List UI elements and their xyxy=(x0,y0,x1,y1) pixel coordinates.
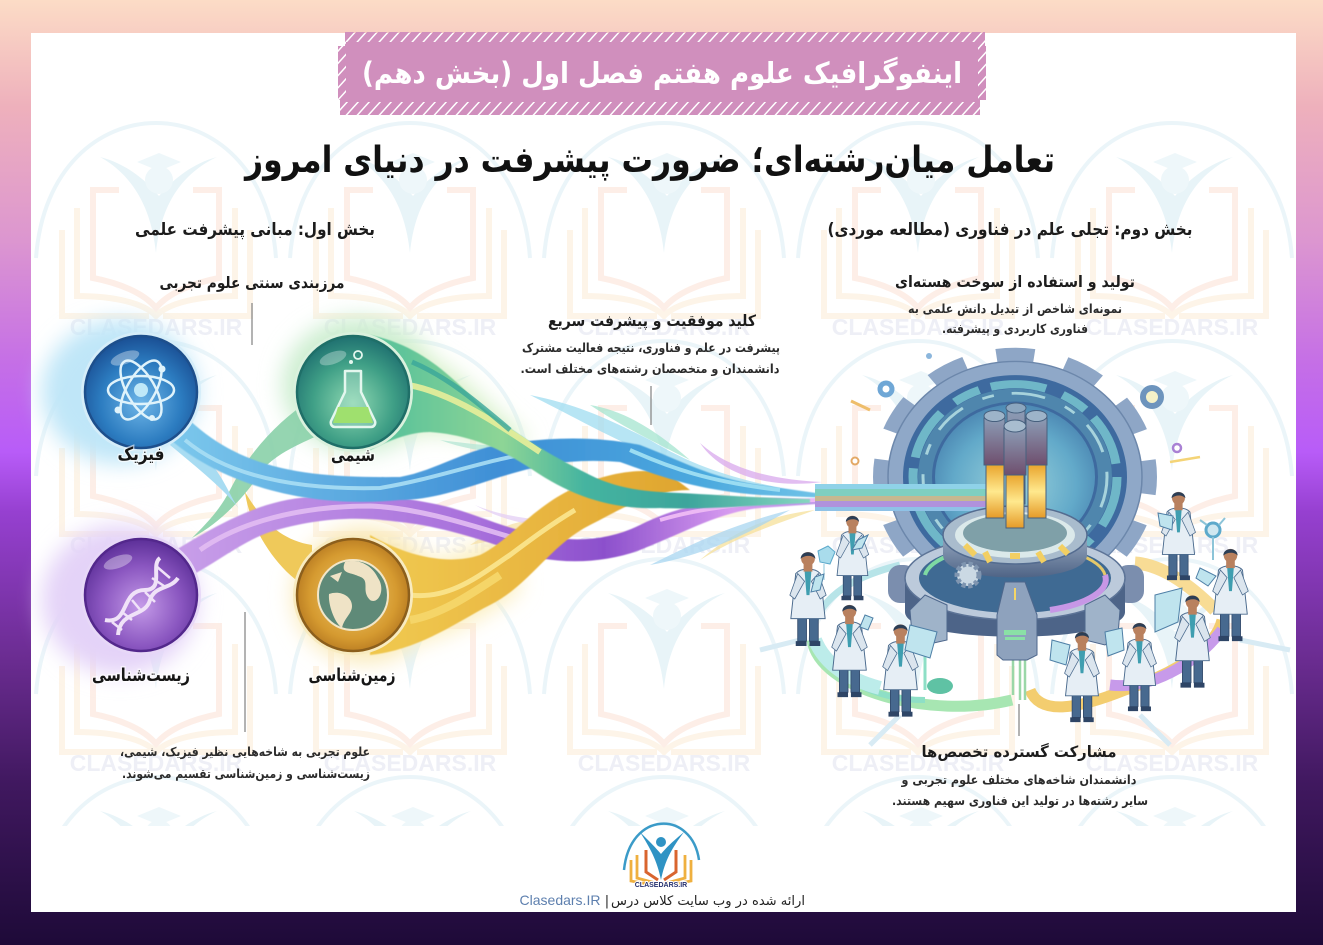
section heading: part two: بخش دوم: تجلی علم در فناوری (مطالعه موردی) xyxy=(828,220,1192,240)
watermark pattern: CLASEDARS.IR xyxy=(70,532,243,558)
watermark pattern: CLASEDARS.IR xyxy=(324,532,497,558)
text block: key to success: پیشرفت در علم و فناوری، نتیجه فعالیت مشترک xyxy=(522,340,780,355)
scientist 8 xyxy=(1213,549,1248,641)
illustration: small gears and particles xyxy=(851,353,1200,464)
icon: DNA helix xyxy=(105,558,178,635)
illustration: energy beam xyxy=(815,484,995,511)
wisps xyxy=(440,395,822,565)
text block: broad expertise: دانشمندان شاخه‌های مختلف علوم تجربی و xyxy=(901,772,1136,788)
text block: key to success: کلید موفقیت و پیشرفت سریع xyxy=(548,312,757,331)
orb: biology xyxy=(81,535,201,655)
text block: nuclear fuel: نمونه‌ای شاخص از تبدیل دانش علمی به xyxy=(908,301,1122,316)
tablets xyxy=(811,513,1216,665)
watermark pattern: CLASEDARS.IR xyxy=(324,750,497,776)
watermark pattern: CLASEDARS.IR xyxy=(1086,532,1259,558)
footer credit: ارائه شده در وب سایت کلاس درس xyxy=(611,894,805,909)
rod back centre xyxy=(1006,403,1026,504)
text block: nuclear fuel xyxy=(895,273,1135,336)
discipline labels: زمین‌شناسی xyxy=(308,665,396,686)
logo xyxy=(624,824,699,889)
footer credit: Clasedars.IR xyxy=(520,892,600,908)
stream: purple xyxy=(160,495,830,590)
orb: chemistry xyxy=(293,332,413,452)
scientist 1 xyxy=(790,552,826,646)
illustration: gear xyxy=(884,358,1146,596)
console pods xyxy=(910,595,947,645)
rod right xyxy=(1026,410,1047,518)
stream: blue xyxy=(160,400,830,502)
scientist 7 xyxy=(1175,595,1210,688)
text block: nuclear fuel: فناوری کاربردی و پیشرفته. xyxy=(942,321,1088,336)
scientist 4 xyxy=(883,624,918,717)
illustration: fuel rods xyxy=(984,403,1047,528)
text block: sciences branches xyxy=(120,744,370,781)
icons: scientists' floating holograms xyxy=(818,518,1225,580)
stream: yellow xyxy=(370,471,690,655)
watermark pattern: CLASEDARS.IR xyxy=(832,750,1005,776)
title: تعامل میان‌رشته‌ای؛ ضرورت پیشرفت در دنیای امروز xyxy=(243,140,1055,181)
orb: physics xyxy=(81,332,201,452)
icon: flask xyxy=(331,351,375,427)
watermark pattern: CLASEDARS.IR xyxy=(1086,314,1259,340)
stream: chemistry left arm xyxy=(192,400,325,538)
watermark pattern: CLASEDARS.IR xyxy=(832,532,1005,558)
discipline labels: شیمی xyxy=(331,445,375,466)
icon: globe xyxy=(318,560,388,630)
watermark pattern: CLASEDARS.IR xyxy=(70,314,243,340)
footer credit xyxy=(520,892,805,909)
section heading: part one: بخش اول: مبانی پیشرفت علمی xyxy=(135,220,375,240)
stream: geology left arm xyxy=(245,492,312,590)
orb: geology xyxy=(293,535,413,655)
watermark pattern: CLASEDARS.IR xyxy=(832,314,1005,340)
scientist 3 xyxy=(832,605,867,697)
logo: CLASEDARS.IR xyxy=(635,882,687,889)
rod front xyxy=(1004,420,1026,528)
subheading: traditional boundaries: مرزبندی سنتی علوم تجربی xyxy=(160,274,344,292)
watermark pattern xyxy=(31,118,1296,826)
banner xyxy=(338,32,986,115)
banner: اینفوگرافیک علوم هفتم فصل اول (بخش دهم) xyxy=(362,56,962,90)
text block: broad expertise xyxy=(892,742,1148,808)
text block: key to success: دانشمندان و متخصصان رشته‌های مختلف است. xyxy=(520,361,780,376)
text block: nuclear fuel: تولید و استفاده از سوخت هسته‌ای xyxy=(895,273,1135,291)
scientists group xyxy=(790,492,1248,722)
text block: sciences branches: علوم تجربی به شاخه‌هایی نظیر فیزیک، شیمی، xyxy=(120,744,370,760)
text block: broad expertise: مشارکت گسترده تخصص‌ها xyxy=(922,742,1116,761)
discipline labels: فیزیک xyxy=(118,444,164,465)
watermark pattern: CLASEDARS.IR xyxy=(578,314,751,340)
text block: broad expertise: سایر رشته‌ها در تولید این فناوری سهیم هستند. xyxy=(892,793,1148,808)
scientist 9 xyxy=(1161,492,1195,580)
text block: key to success xyxy=(520,312,780,376)
icon: atom xyxy=(108,354,174,426)
flowing discipline streams xyxy=(42,317,830,675)
discipline labels xyxy=(92,444,396,686)
soft glows behind orbs xyxy=(42,317,530,675)
discipline labels: زیست‌شناسی xyxy=(92,665,190,686)
watermark pattern: CLASEDARS.IR xyxy=(578,532,751,558)
text block: sciences branches: زیست‌شناسی و زمین‌شناسی تقسیم می‌شوند. xyxy=(122,766,370,781)
connector lines xyxy=(245,303,1019,736)
illustration: reactor base xyxy=(888,506,1144,660)
stream: green xyxy=(370,335,810,508)
scientist 6 xyxy=(1122,623,1156,711)
illustration: floor circuit paths xyxy=(760,563,1290,745)
scientist 5 xyxy=(1065,632,1099,722)
watermark pattern: CLASEDARS.IR xyxy=(324,314,497,340)
watermark pattern: CLASEDARS.IR xyxy=(70,750,243,776)
watermark pattern: CLASEDARS.IR xyxy=(1086,750,1259,776)
rod left xyxy=(984,410,1005,518)
watermark pattern: CLASEDARS.IR xyxy=(578,750,751,776)
scientist 2 xyxy=(836,516,869,600)
footer credit: | xyxy=(605,894,609,909)
